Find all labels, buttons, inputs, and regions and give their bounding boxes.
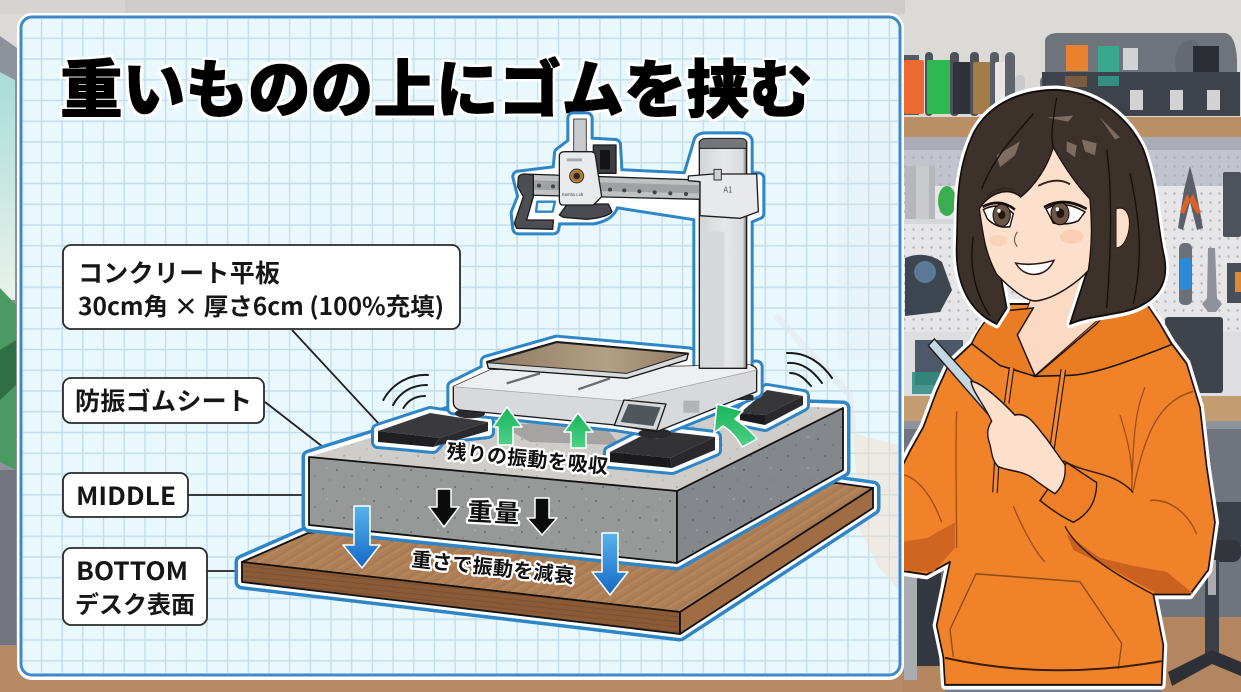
right pad: [740, 390, 803, 425]
printer base: [453, 342, 757, 438]
dark tool tag: [1223, 172, 1241, 237]
slab top: [309, 397, 843, 491]
gantry block: [688, 174, 758, 218]
3D printer: [453, 118, 758, 438]
neck: [1017, 268, 1100, 375]
eyes: [983, 181, 1087, 227]
vibration waves left: [383, 375, 428, 408]
touch screen: [614, 400, 666, 431]
desk right face: [680, 488, 873, 634]
hoodie pocket: [950, 574, 1122, 669]
label: remaining vibration: 残りの振動を吸収: [445, 435, 609, 479]
drawstrings: [995, 368, 1063, 492]
floor: [0, 646, 1241, 692]
wrench: [1202, 248, 1222, 312]
toolhead: [559, 152, 602, 205]
hoodie silhouette outline: [900, 304, 1215, 685]
desk front face: [242, 562, 680, 634]
printer halo: [453, 342, 757, 432]
desk top surface: [242, 483, 873, 612]
callout: bottom desk surface: BOTTOM: [76, 552, 188, 588]
label: weight: 重量: [467, 492, 520, 531]
hoodie folds and shadows: [900, 387, 1197, 594]
rear extruder: [593, 145, 616, 173]
office chair: [1165, 502, 1241, 686]
build plate: [487, 342, 688, 378]
column and gantry: Bambu Lab: [562, 192, 584, 198]
callout: middle: MIDDLE: [76, 477, 176, 513]
callout: concrete slab: [63, 245, 460, 329]
filament storage box: [1040, 33, 1240, 116]
pliers: [1178, 166, 1203, 230]
helmet-like tool: [905, 255, 952, 316]
ear: [1116, 208, 1129, 248]
jeans: [945, 677, 1162, 692]
hair: [957, 90, 1165, 324]
smile: [1016, 260, 1054, 274]
face: [979, 147, 1091, 301]
callout: bottom desk surface: [63, 548, 207, 625]
slab front: [309, 457, 677, 563]
dark box: [1165, 317, 1223, 393]
hoodie hem: [945, 658, 1162, 670]
column and gantry: [514, 119, 758, 368]
callout: middle: [63, 473, 188, 517]
green arrows: absorb remaining vibration: [493, 404, 757, 448]
pointing hand: [971, 381, 1065, 494]
small machine on desk: [915, 340, 963, 385]
nozzle shroud: [559, 204, 612, 219]
wooden desk board: [242, 483, 873, 634]
callout: bottom desk surface: デスク表面: [75, 585, 195, 620]
speaker grille: [683, 401, 699, 413]
callout: rubber sheet: 防振ゴムシート: [75, 382, 252, 418]
shelf with filament spools: [903, 52, 1025, 116]
filament tube: [574, 119, 586, 152]
label: damping by weight: 重さで振動を減衰: [410, 543, 576, 589]
window and plant at far left: [0, 36, 17, 650]
shadow under printer: [500, 420, 620, 445]
bed rails: [507, 373, 610, 389]
ghost of character hand seen through panel: [775, 120, 898, 590]
concrete slab: [309, 397, 843, 563]
pegboard with tools: [903, 150, 1241, 400]
hair silhouette outline: [957, 90, 1165, 324]
blush and nose: [990, 229, 1083, 247]
title: 重いものの上にゴムを挟む: [60, 40, 812, 131]
blue screwdriver: [1179, 243, 1192, 305]
vibration waves right: [787, 353, 832, 386]
callout: concrete slab: コンクリート平板: [78, 254, 280, 290]
hoodie body: [900, 304, 1215, 685]
panel: blueprint grid board: [17, 13, 904, 680]
hood flaps: [972, 308, 1035, 376]
hair highlights: [997, 116, 1120, 167]
blue arrows: damping: [343, 506, 628, 595]
character: woman in orange hoodie: [900, 90, 1215, 692]
rubber pads: [378, 390, 803, 468]
lower wall and desk: [903, 396, 1241, 680]
callout: concrete slab: 30cm角 × 厚さ6cm (100%充填): [78, 287, 444, 322]
black arrows: weight: [429, 489, 557, 535]
leader lines: [188, 330, 380, 571]
wooden shelf: [903, 117, 1241, 137]
column and gantry: A1: [723, 185, 732, 196]
stylus pen: [928, 339, 1007, 426]
left pad: [378, 413, 488, 447]
side bracket: [514, 174, 553, 229]
X-axis rail: [523, 174, 700, 199]
middle pad: [610, 430, 715, 468]
slab right: [677, 408, 843, 563]
